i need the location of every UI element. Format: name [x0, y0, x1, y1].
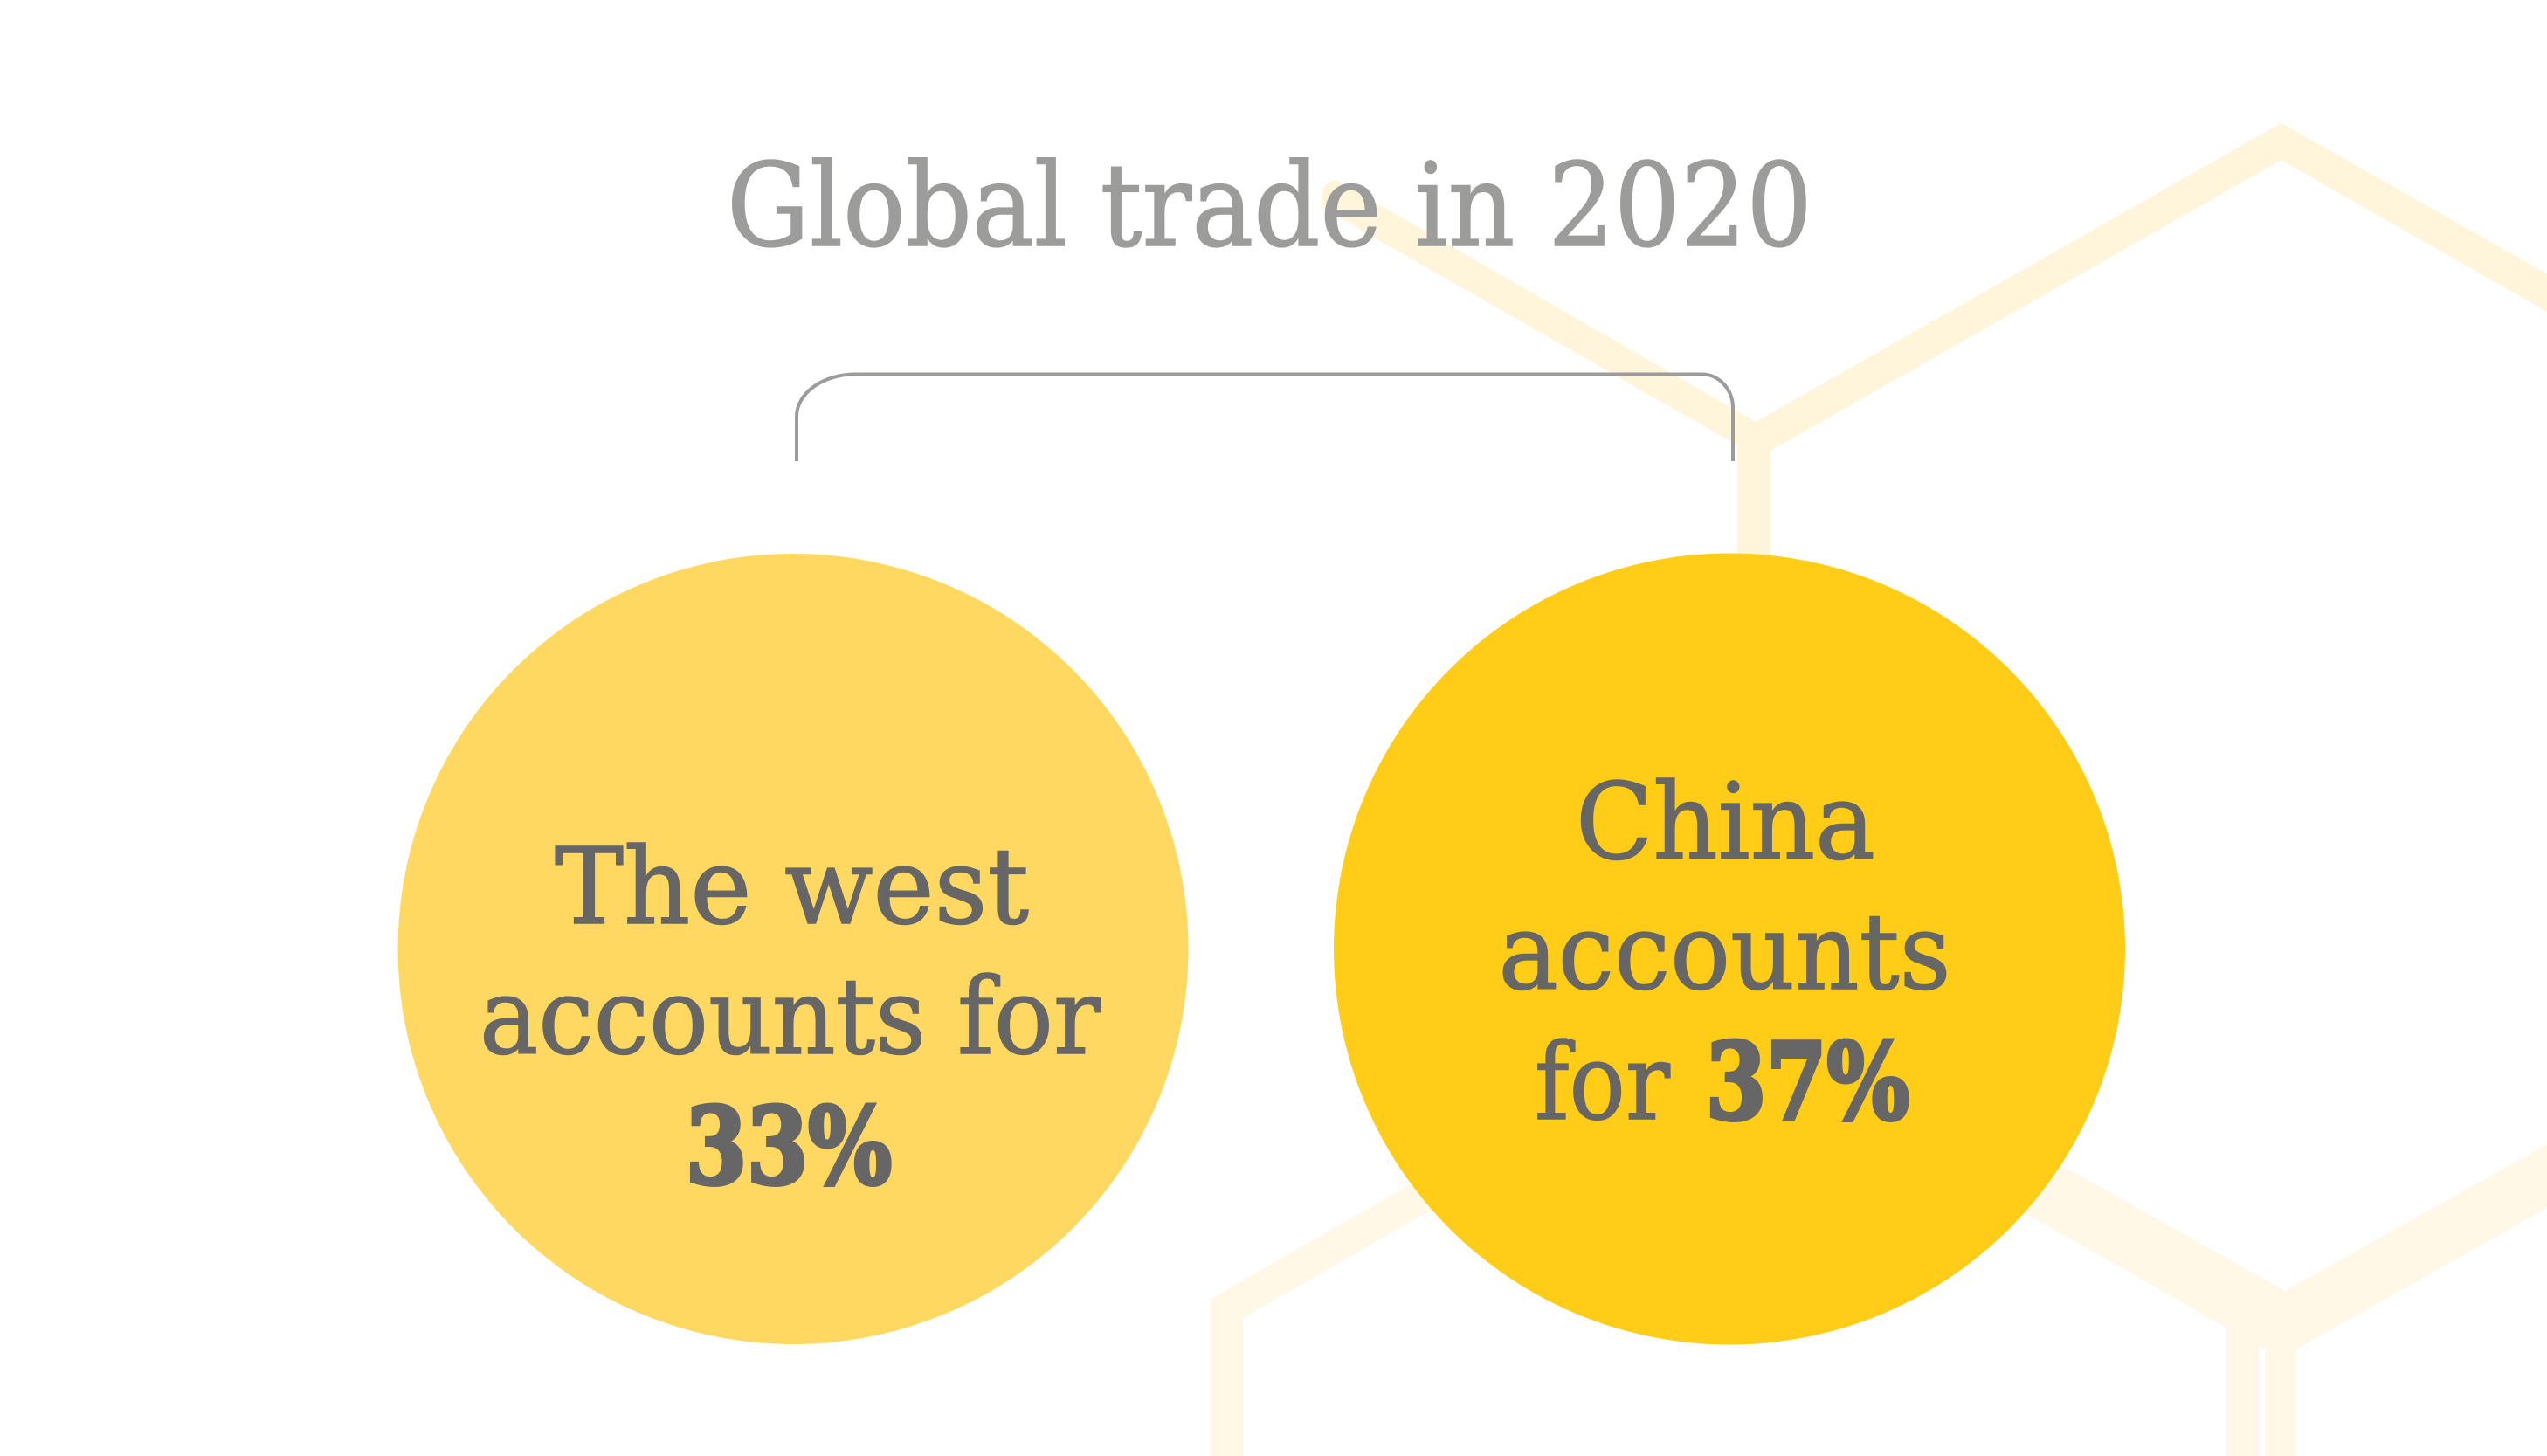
label: China accounts for 37%: China	[1576, 761, 1875, 884]
label: the west accounts for 33%: accounts for	[480, 956, 1101, 1079]
background: upper hexagon outline	[1322, 123, 2547, 611]
panel: the west circle	[398, 554, 1188, 1344]
circle: China	[1334, 554, 2125, 1345]
label: the west accounts for 33%: The west	[555, 825, 1029, 949]
background: lower hexagon outlines	[1211, 1087, 2547, 1456]
label: the west accounts for 33%: 33%	[686, 1084, 892, 1209]
label: China accounts for 37%: 37%	[1706, 1019, 1909, 1144]
label: China accounts for 37%: accounts	[1499, 891, 1951, 1014]
panel: China circle	[1334, 554, 2125, 1345]
bracket connecting the two circles	[797, 374, 1733, 461]
label: China accounts for 37%: for	[1535, 1021, 1670, 1144]
title: Global trade in 2020	[727, 139, 1812, 273]
circle: the west	[398, 554, 1188, 1344]
